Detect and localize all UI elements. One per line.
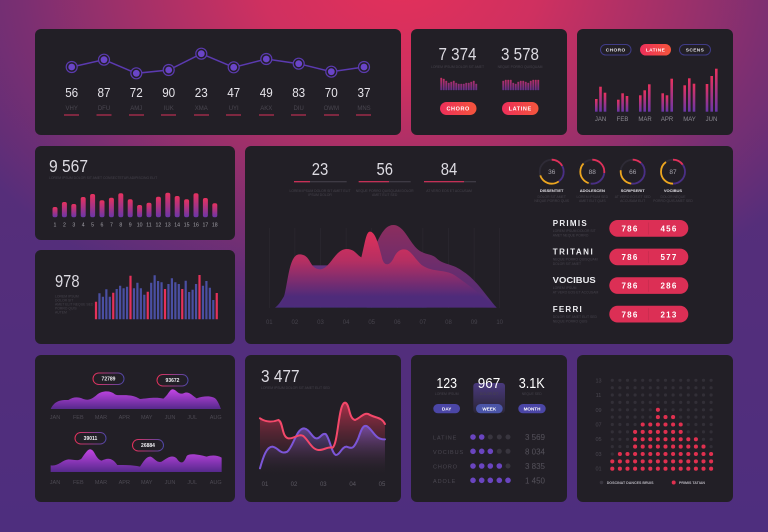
score captions: DOLOR SIT [480, 392, 498, 396]
score captions [435, 392, 542, 396]
month labels [595, 117, 717, 123]
donut: dissentiet: DOLOR SIT AMET [538, 195, 566, 199]
total values: 7 374 [438, 44, 477, 64]
panel: 978 thin bars [35, 250, 235, 344]
panel: two totals with mini bars [411, 29, 567, 135]
rating row labels: LATINE [433, 436, 457, 442]
stat: 84: 84 [441, 159, 457, 179]
panel: day week month scores [411, 355, 567, 502]
row: tritani: NEQUE PORRO QUISQUAM [553, 258, 598, 262]
bar numbers: 17 [203, 222, 208, 228]
row: tritani: 577 [661, 253, 677, 262]
y axis labels: 05 [595, 437, 602, 443]
month labels, upper [50, 415, 222, 421]
month labels: APR [661, 117, 674, 123]
donut: adolescen [576, 160, 609, 203]
donut: adolescen: ADOLESCEN [580, 188, 605, 193]
total captions: LOREM IPSUM DOLOR SIT AMET [431, 65, 484, 69]
row: ferri: DOLOR SIT AMET ELIT SED [553, 315, 598, 319]
legend [600, 480, 705, 485]
row: primis: 456 [661, 224, 677, 234]
donut: vocibus: PORRO QUIS AMET SED [653, 199, 693, 203]
row: primis: LOREM IPSUM DOLOR SIT [553, 229, 596, 233]
pill: choro [600, 44, 631, 55]
y axis labels: 07 [595, 422, 602, 428]
row: primis: PRIMIS [553, 219, 587, 228]
description: AUTEM [55, 310, 67, 314]
month labels: JAN [595, 117, 606, 123]
dot grid highlighted values [612, 410, 711, 469]
panel: 9 567 rounded bars [35, 146, 235, 240]
stat: 23 [289, 159, 351, 197]
metric labels: OWM [324, 106, 339, 112]
row: tritani: 786 [622, 253, 638, 262]
month labels: FEB [617, 117, 628, 123]
value: 9 567 [49, 156, 88, 176]
score captions: NEQUE SED [522, 392, 542, 396]
axis labels [262, 482, 386, 488]
month labels: MAY [683, 117, 696, 123]
row: primis: AMET NEQUE PORRO [553, 234, 589, 238]
pill: latine: LATINE [646, 48, 666, 54]
total captions: NEQUE PORRO QUISQUAM [498, 65, 543, 69]
bar numbers: 18 [212, 222, 218, 228]
metric values: 47 [227, 85, 240, 100]
line chart nodes [66, 48, 369, 79]
rating dots on [470, 434, 511, 483]
panel: grouped monthly bars [577, 29, 733, 135]
bar numbers: 10 [137, 222, 143, 228]
scores [436, 375, 545, 392]
month labels, upper: AUG [210, 415, 222, 421]
value: 978 [55, 271, 80, 291]
donut: vocibus [653, 160, 693, 203]
donut: dissentiet: NEQUE PORRO QUIS [534, 199, 570, 203]
month labels, lower: FEB [73, 480, 84, 486]
bar numbers: 14 [174, 222, 180, 228]
rating values: 3 835 [525, 462, 546, 471]
stat: 56 [356, 159, 414, 197]
area chart [275, 225, 497, 308]
button: week: WEEK [482, 406, 497, 412]
y axis labels: 01 [595, 467, 602, 473]
area chart axis: 04 [343, 320, 350, 326]
score captions: LOREM IPSUM [435, 392, 459, 396]
donut: vocibus: VOCIBUS [664, 188, 682, 193]
row: vocibus: LOREM IPSUM [553, 286, 577, 290]
week highlight [473, 383, 505, 413]
row: vocibus: 786 [622, 282, 638, 291]
metric values: 87 [98, 85, 110, 100]
area chart axis: 05 [368, 320, 376, 326]
pill: scens: SCENS [686, 48, 705, 54]
rounded bars [52, 193, 217, 217]
metric values: 83 [292, 85, 305, 100]
axis labels: 05 [379, 482, 386, 488]
legend: PRIMIS TATIAN [679, 481, 705, 485]
button: latine: LATINE [509, 106, 532, 112]
row: ferri: NEQUE PORRO QUIS [553, 319, 588, 323]
month labels, lower: APR [119, 480, 130, 486]
metric labels: MNS [357, 106, 371, 112]
metric labels: VHY [66, 106, 78, 112]
area chart axis: 02 [292, 320, 299, 326]
month labels, upper: MAR [95, 415, 107, 421]
month labels, upper: JUL [187, 415, 197, 421]
bar numbers: 6 [101, 222, 104, 228]
panel: violet wave charts [35, 355, 235, 502]
metric values: 49 [260, 85, 273, 100]
button: day [433, 404, 460, 413]
bar numbers: 9 [129, 222, 132, 228]
month labels, upper: FEB [73, 415, 84, 421]
area chart axis: 01 [266, 320, 273, 326]
area chart axis: 08 [445, 320, 452, 326]
button: month [518, 404, 546, 413]
panel: main dashboard [245, 146, 733, 344]
button: choro [440, 102, 476, 115]
donut: vocibus: DOLOR NEQUE [660, 195, 686, 199]
donut: scripserit: ACCUSAM ELIT [620, 199, 645, 203]
donut: adolescen: 88 [589, 169, 596, 176]
stat: 23: IPSUM DOLOR [308, 193, 332, 197]
month labels, lower: MAY [141, 480, 153, 486]
y axis labels: 03 [595, 452, 602, 458]
row: ferri: FERRI [553, 305, 582, 314]
bar numbers: 12 [156, 222, 161, 228]
scores: 3.1K [519, 375, 545, 392]
month labels, upper: MAY [141, 415, 153, 421]
row: vocibus: VOCIBUS [553, 276, 596, 285]
metric underlines [64, 114, 371, 116]
donut: scripserit [615, 160, 651, 203]
axis labels: 01 [262, 482, 269, 488]
rating values: 8 034 [525, 448, 546, 456]
total values: 3 578 [501, 44, 539, 64]
row: vocibus: AT VERO EOS ET ACCUSAM [553, 291, 598, 295]
rating row labels: ADOLE [433, 479, 456, 485]
wave charts [51, 389, 222, 472]
description: AMET ELIT NEQUE SED [55, 302, 94, 306]
donut: vocibus: 87 [669, 169, 677, 176]
donut: dissentiet [534, 160, 570, 203]
row: vocibus: 286 [661, 282, 677, 291]
rating values: 3 569 [525, 433, 546, 442]
button: day: DAY [442, 406, 451, 412]
row: ferri [553, 305, 688, 323]
y axis labels: 13 [595, 378, 602, 384]
panel: 3 477 line chart [245, 355, 401, 502]
metric labels: UYI [229, 106, 239, 112]
y axis labels: 09 [595, 408, 602, 414]
axis labels: 02 [291, 482, 298, 488]
caption: LOREM IPSUM DOLOR SIT AMET ELIT SED [261, 386, 331, 390]
rating row labels: VOCIBUS [433, 450, 464, 456]
bar numbers: 11 [146, 222, 152, 228]
callout: 39011: 39011 [84, 436, 98, 442]
y axis labels: 11 [596, 393, 601, 399]
rating dots off [488, 434, 510, 468]
grouped bars [595, 69, 718, 112]
dual line chart [260, 403, 385, 475]
month labels, upper: JAN [50, 415, 60, 421]
metric values: 70 [325, 85, 338, 100]
row: primis [553, 219, 688, 238]
metric labels [66, 106, 371, 112]
donut: dissentiet: 36 [548, 169, 556, 176]
stat: 23: 23 [312, 159, 328, 179]
panel: dot matrix chart [577, 355, 733, 502]
month labels, lower: JUL [187, 480, 197, 486]
button: latine [502, 102, 538, 115]
bar numbers: 5 [91, 222, 94, 228]
caption: LOREM IPSUM DOLOR SIT AMET CONSECTETUR ADIPISCING ELIT [49, 176, 157, 180]
value: 3 477 [261, 366, 300, 386]
button: choro: CHORO [446, 106, 470, 112]
metric labels: DFU [98, 106, 110, 112]
bar numbers: 8 [119, 222, 122, 228]
metric values: 37 [358, 85, 370, 100]
donut: adolescen: LOREM IPSUM SED [576, 195, 609, 199]
area chart axis [266, 320, 504, 326]
bar numbers: 16 [193, 222, 199, 228]
total values [438, 44, 539, 64]
callout: 39011 [75, 432, 106, 444]
row: ferri: 213 [661, 310, 677, 319]
button: week [476, 404, 503, 413]
bar numbers [54, 222, 218, 228]
total captions [431, 65, 543, 69]
button: month: MONTH [524, 406, 541, 412]
donut: adolescen: AMET ELIT QUIS [579, 199, 606, 203]
area chart axis: 09 [471, 320, 478, 326]
bar numbers: 3 [72, 222, 75, 228]
red bars [96, 275, 217, 319]
metric labels: AMJ [130, 106, 142, 112]
callout: 72789 [93, 373, 124, 384]
scores: 967 [478, 375, 500, 392]
donut: scripserit: AT VERO EOS ET SED [615, 195, 651, 199]
stat: 84 [424, 159, 476, 193]
bar numbers: 2 [63, 222, 66, 228]
callout: 26884: 26884 [141, 443, 155, 449]
area chart axis: 06 [394, 320, 401, 326]
axis labels: 03 [320, 482, 327, 488]
y axis labels [595, 378, 602, 473]
blue bars [99, 275, 213, 319]
bar numbers: 7 [110, 222, 113, 228]
stat: 23: LOREM IPSUM DOLOR SIT AMET ELIT [289, 189, 351, 193]
metric values: 56 [65, 85, 78, 100]
month labels: MAR [638, 117, 652, 123]
pill: latine [640, 44, 671, 56]
stat: 56: AMET ELIT SED [372, 193, 398, 197]
metric values: 90 [162, 85, 175, 100]
metric values: 23 [195, 85, 208, 100]
bar numbers: 4 [82, 222, 85, 228]
rating row labels: CHORO [433, 464, 458, 470]
pill: scens [680, 44, 710, 55]
callout: 93672: 93672 [166, 378, 180, 384]
month labels, lower: MAR [95, 480, 107, 486]
area chart axis: 10 [496, 320, 504, 326]
rating values [525, 433, 546, 486]
rating values: 1 450 [525, 476, 546, 486]
metric labels: IUK [164, 106, 174, 112]
scores: 123 [436, 375, 457, 392]
month labels, upper: APR [119, 415, 130, 421]
description [55, 294, 94, 314]
month labels, lower: AUG [210, 480, 222, 486]
callout: 93672 [157, 374, 188, 386]
donut: scripserit: SCRIPSERIT [621, 188, 645, 193]
pill: choro: CHORO [606, 48, 626, 54]
area chart axis: 07 [420, 320, 427, 326]
stat: 56: 56 [376, 159, 393, 179]
rating row labels [433, 436, 464, 485]
bar numbers: 13 [165, 222, 171, 228]
metric labels: DIU [294, 106, 304, 112]
month labels, lower: JUN [165, 480, 175, 486]
dot grid background [612, 380, 712, 469]
stat: 84: AT VERO EOS ET ACCUSAM [426, 189, 472, 193]
stat: 56: NEQUE PORRO QUISQUAM DOLOR [356, 189, 414, 193]
metric values [65, 85, 370, 100]
metric labels: XMA [195, 106, 208, 112]
row: tritani: DOLOR SIT AMET [553, 262, 581, 266]
month labels, lower: JAN [50, 480, 60, 486]
metric labels: AKX [260, 106, 272, 112]
description: DOLOR SIT [55, 298, 73, 302]
row: tritani [553, 248, 688, 266]
row: primis: 786 [622, 224, 638, 234]
bar numbers: 1 [54, 222, 57, 228]
donut: dissentiet: DISSENTIET [540, 188, 564, 193]
row: ferri: 786 [622, 310, 638, 319]
month labels: JUN [706, 117, 717, 123]
month labels, upper: JUN [165, 415, 175, 421]
description: PORRO QUIS [55, 306, 77, 310]
legend: DOSCINAT DANCES BRUIS [607, 481, 654, 485]
donut: scripserit: 66 [629, 169, 637, 176]
mini bars [440, 78, 539, 90]
metric values: 72 [130, 85, 143, 100]
row: tritani: TRITANI [553, 248, 593, 257]
row: vocibus [553, 276, 688, 295]
month labels, lower [50, 480, 222, 486]
area chart axis: 03 [317, 320, 324, 326]
description: LOREM IPSUM [55, 294, 79, 298]
callout: 72789: 72789 [102, 377, 116, 383]
callout: 26884 [132, 440, 164, 451]
panel: line chart with ten metrics [35, 29, 401, 135]
axis labels: 04 [349, 482, 357, 488]
bar numbers: 15 [184, 222, 190, 228]
area chart grid [269, 228, 500, 308]
